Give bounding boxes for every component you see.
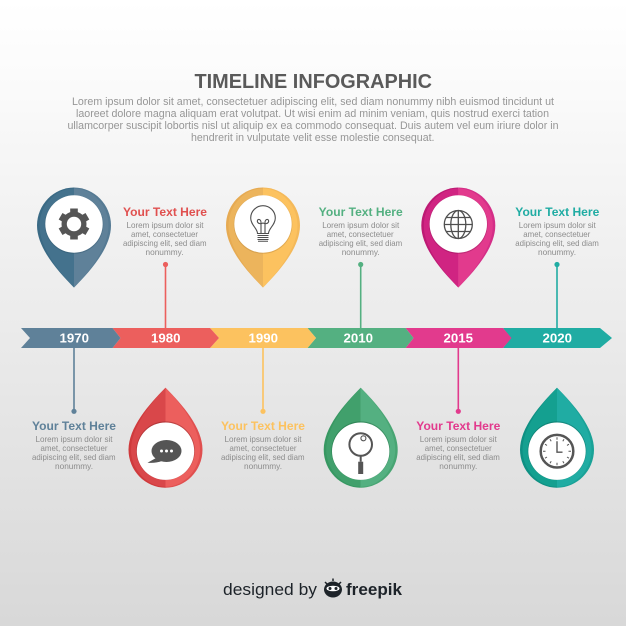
segment 2010: [308, 328, 414, 348]
segment 1990: 1990: [248, 332, 278, 346]
intro paragraph: Lorem ipsum dolor sit amet, consectetuer adipiscing elit, sed diam nonummy nibh euismod tincidunt ut: [72, 96, 554, 108]
credit: designed by freepik: designed by: [223, 581, 318, 599]
text block: 2015: adipiscing elit, sed diam: [416, 452, 500, 462]
text block: 2010: adipiscing elit, sed diam: [319, 238, 402, 248]
text block: 2010: Lorem ipsum dolor sit: [322, 220, 400, 230]
icon: globe: [444, 210, 472, 238]
intro paragraph: ullamcorper suscipit lobortis nisl ut aliquip ex ea commodo consequat. Duis autem vel eum iriure dolor in: [68, 120, 558, 132]
credit: designed by freepik: freepik: [346, 580, 403, 599]
text block: 2015: Lorem ipsum dolor sit: [420, 434, 497, 444]
text block: 2020: [515, 206, 600, 257]
text block: 1990: [221, 420, 306, 471]
text block: 2020: amet, consectetuer: [523, 229, 590, 239]
segment 1970: 1970: [60, 332, 89, 346]
text block: 2015: amet, consectetuer: [425, 443, 492, 453]
text block: 1990: Your Text Here: [221, 420, 306, 433]
icon: magnifier: [349, 433, 372, 474]
text block: 1970: Your Text Here: [32, 420, 117, 433]
text block: 1980: Your Text Here: [123, 206, 208, 219]
text block: 1980: nonummy.: [146, 247, 184, 257]
text block: 1980: amet, consectetuer: [131, 229, 198, 239]
text block: 1980: adipiscing elit, sed diam: [123, 238, 207, 248]
text block: 2010: amet, consectetuer: [327, 229, 394, 239]
segment 2020: [503, 328, 612, 348]
text block: 2020: adipiscing elit, sed diam: [515, 238, 599, 248]
text block: 2020: Your Text Here: [515, 206, 600, 219]
title: TIMELINE INFOGRAPHIC: [194, 71, 432, 93]
text block: 1970: Lorem ipsum dolor sit: [36, 434, 113, 444]
text block: 2020: nonummy.: [538, 247, 576, 257]
pin: globe 2015: [421, 188, 495, 288]
drop: clock 2020: [520, 388, 594, 488]
pin: bulb 1990: [226, 188, 300, 288]
segment 2020: 2020: [542, 332, 572, 346]
text block: 1980: Lorem ipsum dolor sit: [126, 220, 204, 230]
icon: gear: [59, 208, 89, 240]
text block: 2015: nonummy.: [439, 461, 477, 471]
text block: 2015: [416, 420, 501, 471]
connector lines: [71, 262, 560, 414]
text block: 2015: Your Text Here: [416, 420, 501, 433]
segment 1970: [21, 328, 120, 348]
text block: 1990: adipiscing elit, sed diam: [221, 452, 305, 462]
text block: 2010: [319, 206, 403, 257]
text block: 1970: adipiscing elit, sed diam: [32, 452, 116, 462]
segment 1990: [210, 328, 316, 348]
text block: 1990: Lorem ipsum dolor sit: [224, 434, 302, 444]
segment 2010: 2010: [344, 332, 373, 346]
text block: 1970: amet, consectetuer: [40, 443, 108, 453]
text block: 1990: nonummy.: [244, 461, 282, 471]
intro paragraph: [68, 96, 558, 144]
text block: 2010: nonummy.: [342, 247, 380, 257]
text block: 2010: Your Text Here: [319, 206, 403, 219]
text block: 1990: amet, consectetuer: [230, 443, 297, 453]
intro paragraph: laoreet dolore magna aliquam erat volutpat. Ut wisi enim ad minim veniam, quis nostrud exerci tation: [76, 108, 549, 120]
text block: 1970: [32, 420, 117, 471]
icon: freepik mascot: [324, 578, 342, 598]
icon: light bulb: [251, 206, 275, 241]
segment 2015: 2015: [444, 332, 473, 346]
text block: 2020: Lorem ipsum dolor sit: [519, 220, 596, 230]
segment 1980: 1980: [151, 332, 181, 346]
drop: speech bubble 1980: [128, 388, 202, 488]
segment 2015: [406, 328, 512, 348]
drop: magnifier 2010: [324, 388, 398, 488]
credit: designed by freepik: [223, 578, 403, 599]
text block: 1970: nonummy.: [55, 461, 93, 471]
timeline arrow band: [21, 328, 612, 348]
intro paragraph: hendrerit in vulputate velit esse molestie consequat.: [191, 132, 434, 144]
text block: 1980: [123, 206, 208, 257]
segment 1980: [112, 328, 219, 348]
icon: speech bubble: [148, 440, 182, 463]
pin: gear 1970: [37, 188, 111, 288]
icon: clock: [541, 435, 573, 468]
